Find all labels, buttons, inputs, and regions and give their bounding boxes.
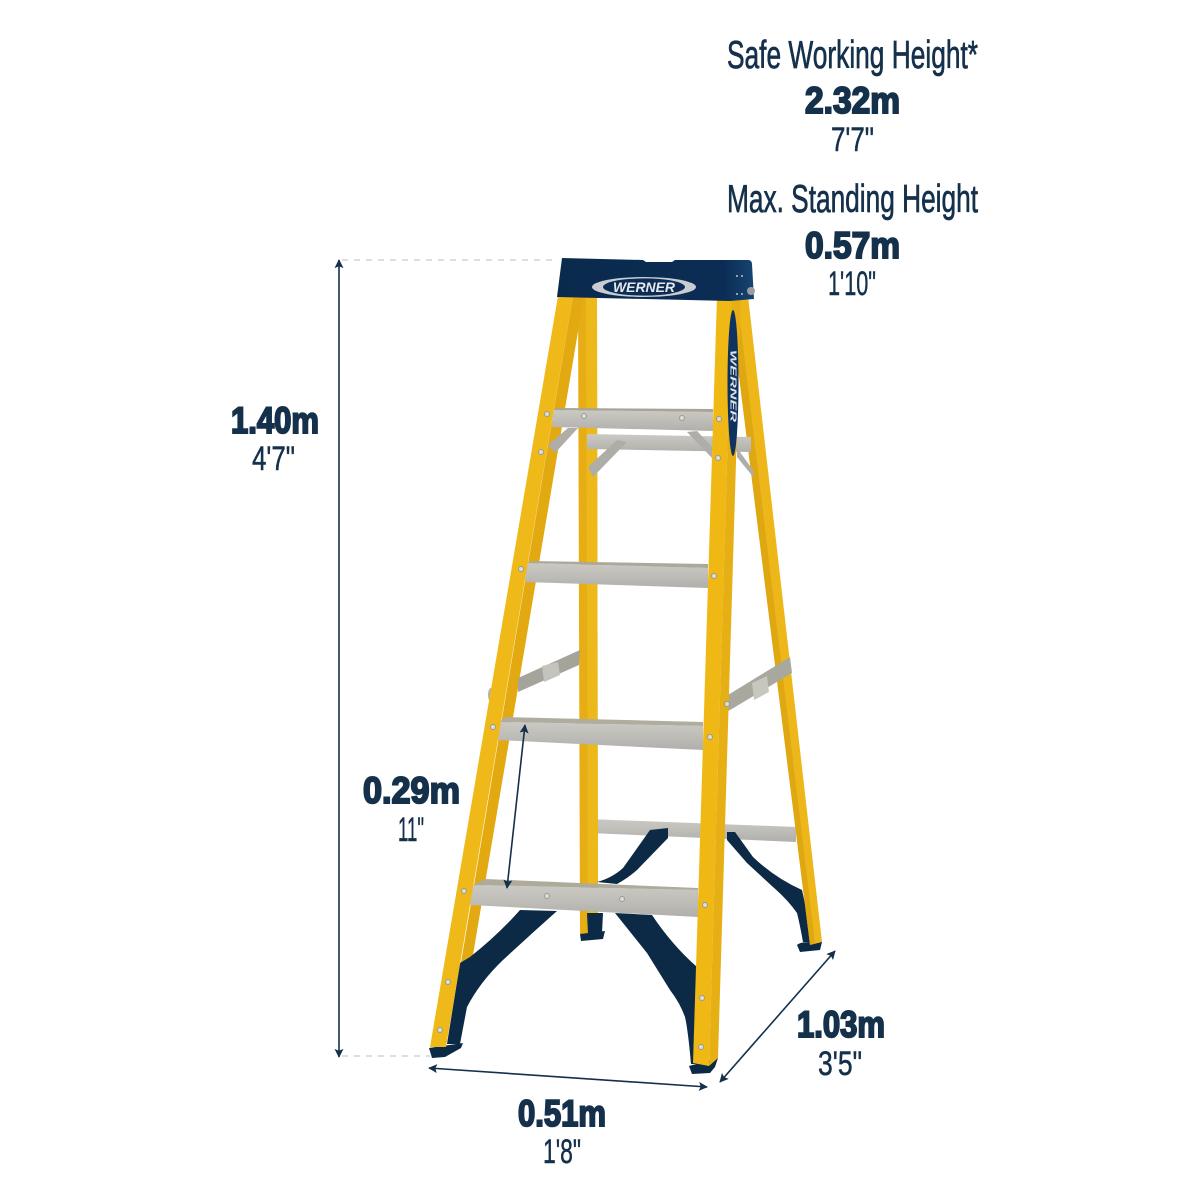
width label: 0.51m: [518, 1093, 606, 1134]
depth label: 1.03m: [797, 1004, 885, 1045]
max standing height: 0.57m: [805, 225, 900, 266]
step spacing label: 0.29m: [363, 770, 460, 811]
arrow: step spacing: [507, 725, 525, 888]
step spacing label: [363, 770, 460, 849]
arrow: width: [429, 1068, 707, 1087]
bolts: [438, 412, 730, 1050]
side logo: [728, 310, 738, 456]
height label: [231, 400, 319, 478]
upper braces: [548, 428, 754, 478]
side logo: WERNER: [728, 350, 738, 422]
front left rail: [430, 296, 573, 1047]
max standing height: 1'10": [828, 265, 876, 303]
step 3: [497, 717, 703, 750]
spreader bars: [488, 650, 792, 713]
height label: 4'7": [252, 440, 295, 478]
rear right rail: [729, 296, 822, 945]
step 1: [552, 408, 713, 431]
navy rear braces: [580, 828, 822, 952]
top cap: [557, 258, 755, 301]
max standing height: Max. Standing Height: [727, 178, 978, 221]
front right rail: [693, 296, 741, 1066]
width label: [518, 1093, 606, 1171]
safe working height: Safe Working Height*: [727, 34, 978, 77]
safe working height: 7'7": [831, 121, 874, 159]
height label: 1.40m: [231, 400, 319, 441]
rear rung lower: [589, 819, 796, 842]
height dimension guides: [342, 260, 558, 1056]
step 2: [525, 561, 708, 588]
rear rung upper: [587, 434, 751, 452]
max standing height: [727, 178, 978, 303]
ladder: [429, 258, 822, 1074]
top cap: WERNER: [613, 279, 676, 295]
arrow: depth: [720, 951, 835, 1082]
safe working height: [727, 34, 978, 159]
front left side face: [448, 296, 584, 1040]
depth label: 3'5": [818, 1045, 862, 1083]
step 4: [470, 879, 698, 917]
safe working height: 2.32m: [805, 80, 900, 121]
arrow: height: [338, 260, 340, 1057]
width label: 1'8": [543, 1133, 581, 1171]
rear left vertical rail: [578, 296, 598, 936]
step spacing label: 11": [398, 811, 424, 849]
navy front braces: [429, 910, 718, 1074]
depth label: [797, 1004, 885, 1083]
